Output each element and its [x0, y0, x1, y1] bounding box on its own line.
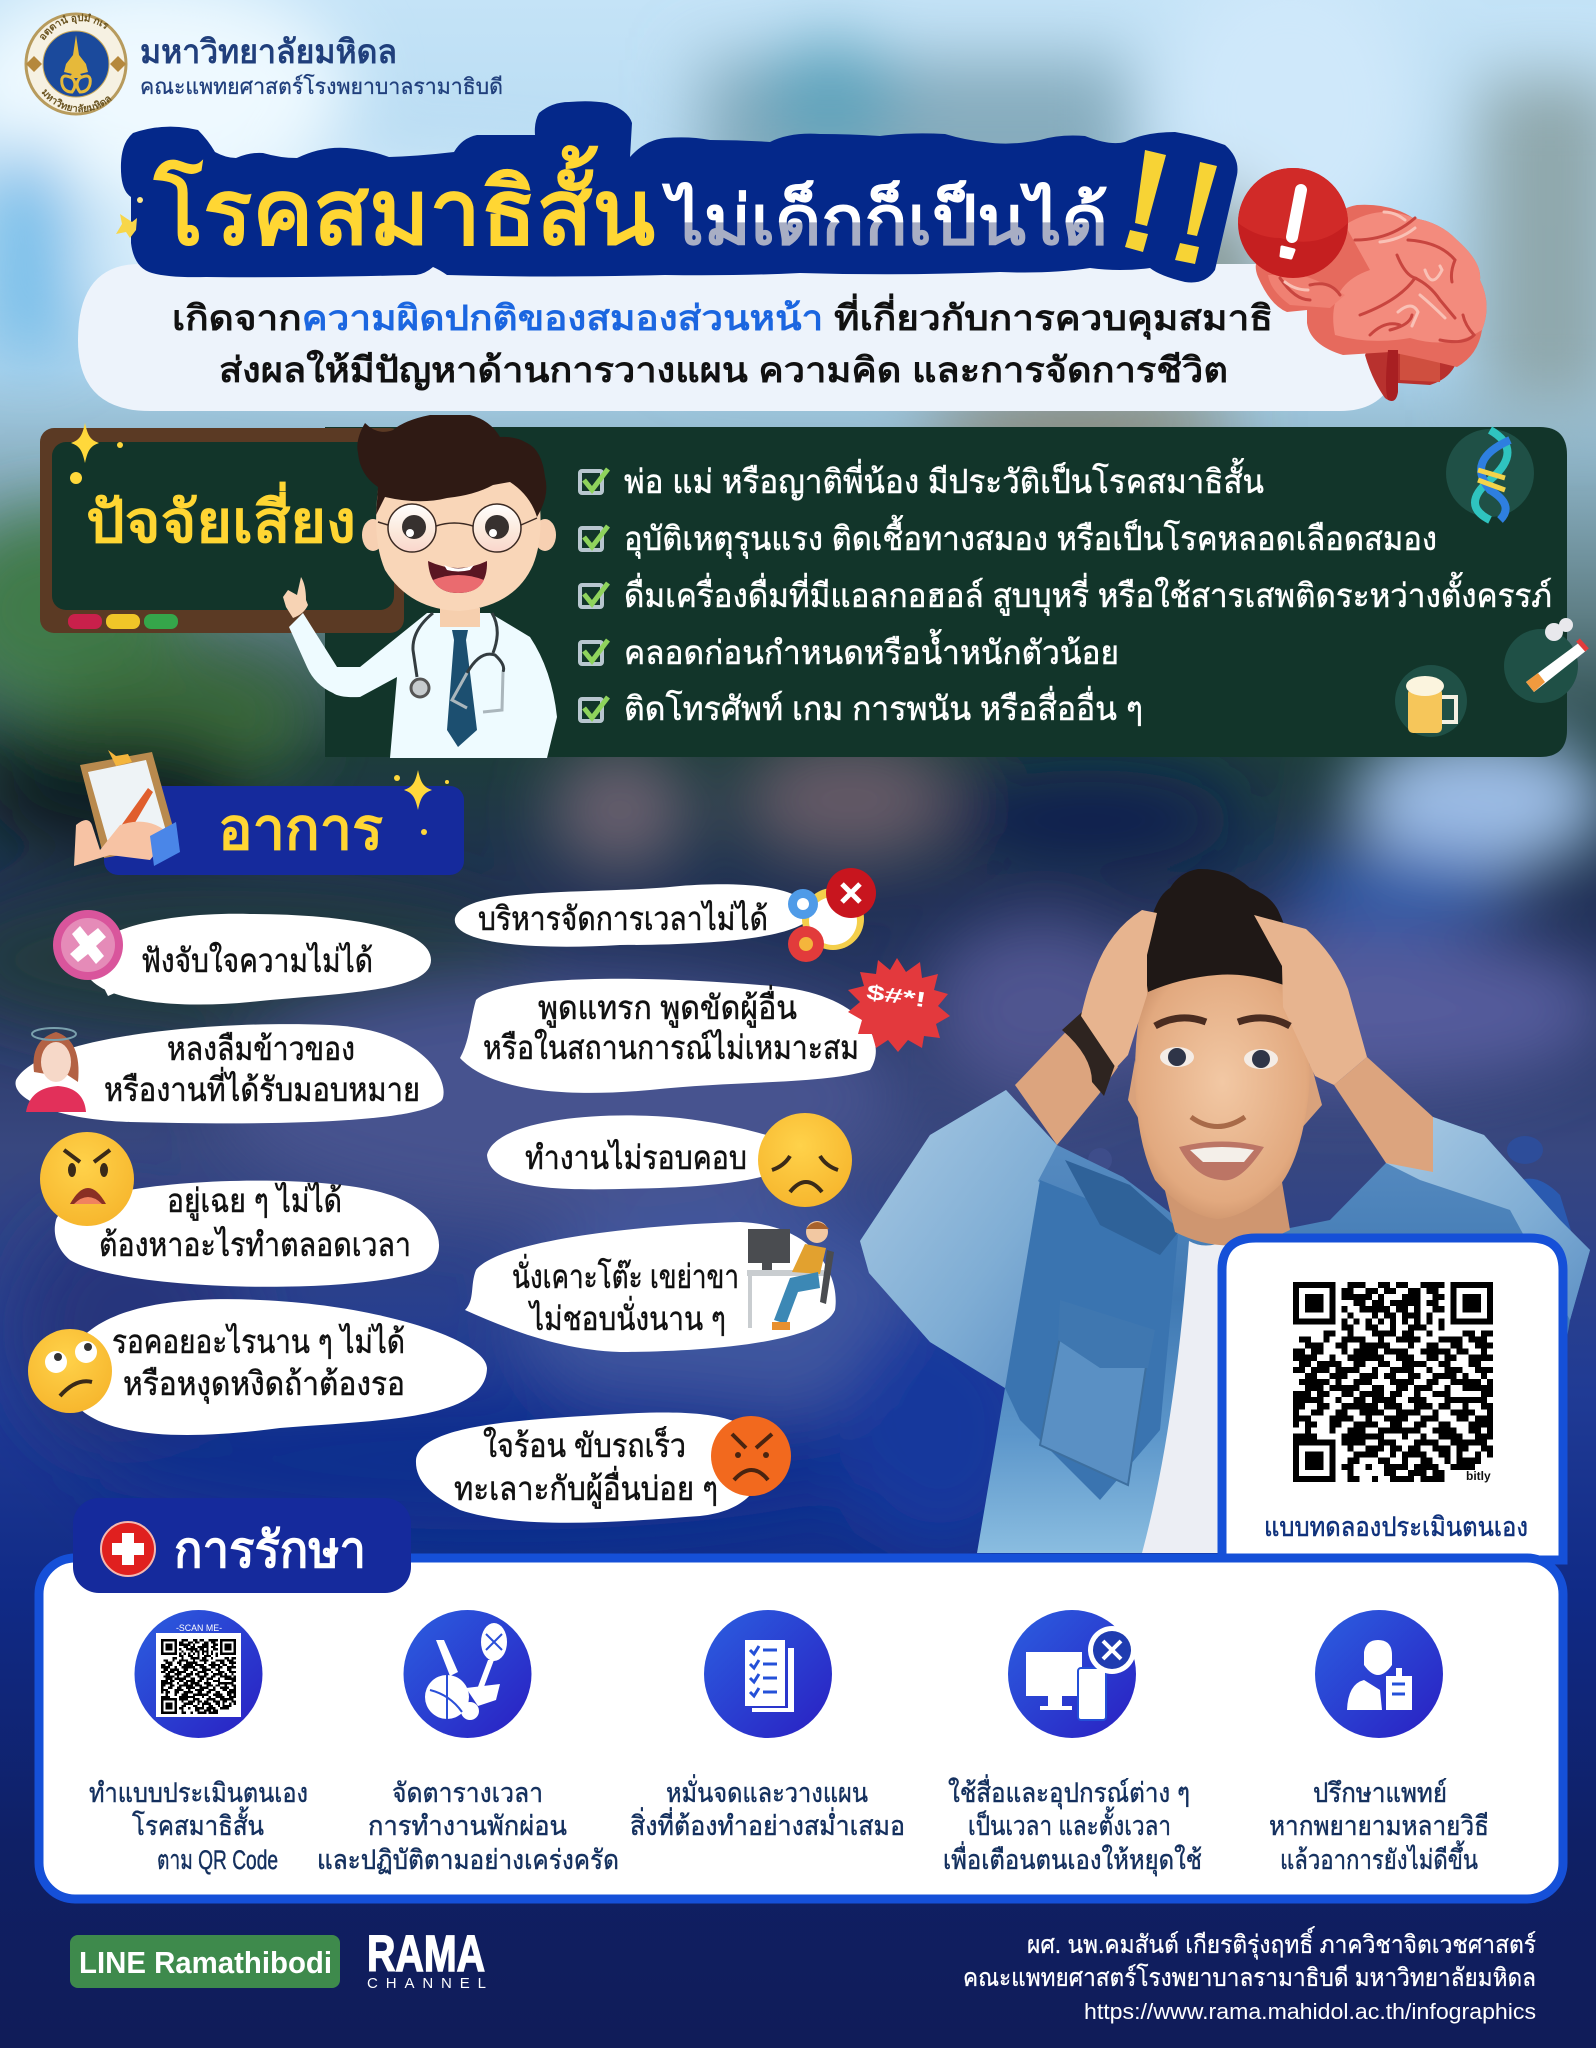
- eyes and brows: [1155, 1018, 1290, 1069]
- panel: QR self-assessment: [1222, 1238, 1563, 1560]
- tie: [447, 630, 477, 747]
- icon: person fidgeting at desk: [747, 1221, 834, 1330]
- icon: rolling eyes emoji: [28, 1329, 112, 1413]
- doctor character: [283, 415, 557, 758]
- panel heading: symptoms: [74, 750, 464, 875]
- mouth: [428, 561, 487, 593]
- symptom bubble 9: ทะเลาะกับผู้อื่นบ่อย ๆ: [454, 1466, 718, 1509]
- glasses and eyes: [378, 504, 537, 552]
- treatment 3: checklist: สิ่งที่ต้องทำอย่างสม่ำเสมอ: [630, 1807, 905, 1841]
- symptom bubble 9: [416, 1413, 791, 1523]
- sparkles: [394, 770, 449, 835]
- risk heading: ปัจจัยเสี่ยง: [86, 481, 356, 555]
- item 4: คลอดก่อนกำหนดหรือน้ำหนักตัวน้อย: [624, 629, 1119, 671]
- hand left: [1081, 910, 1157, 1068]
- symptom bubble 5: [455, 868, 876, 962]
- title: exclamation marks: [1125, 150, 1217, 264]
- icon: shouting emoji: [40, 1132, 134, 1226]
- icon: brain with warning: [1238, 168, 1487, 401]
- footer: LINE pill: LINE Ramathibodi: [79, 1945, 332, 1980]
- item 2: อุบัติเหตุรุนแรง ติดเชื้อทางสมอง หรือเป็นโรคหลอดเลือดสมอง: [624, 515, 1437, 559]
- symptom bubble 4: รอคอยอะไรนาน ๆ ไม่ได้: [112, 1323, 405, 1360]
- treatment 4: limit devices: เป็นเวลา และตั้งเวลา: [968, 1806, 1171, 1841]
- icon: angry emoji: [711, 1416, 791, 1496]
- star: [116, 197, 143, 238]
- checklist: [580, 458, 1552, 727]
- hand right: [1254, 915, 1367, 1085]
- symptom bubble 1: [53, 910, 431, 1005]
- icon: DNA: [1446, 429, 1534, 520]
- item 1: พ่อ แม่ หรือญาติพี่น้อง มีประวัติเป็นโรคสมาธิสั้น: [624, 458, 1264, 500]
- title banner: [116, 101, 1238, 282]
- jacket: [860, 1090, 1590, 1553]
- symptom bubble 3: ต้องหาอะไรทำตลอดเวลา: [99, 1226, 411, 1263]
- icon: swear burst: $#*!: [865, 981, 928, 1012]
- footer: RAMA Channel logo: RAMA: [367, 1925, 485, 1982]
- symptom bubble 8: [465, 1221, 836, 1352]
- logo: Mahidol seal: มหาวิทยาลัยมหิดล: [42, 89, 112, 112]
- nose and mouth: [1179, 1117, 1264, 1180]
- icon: beer: [1395, 665, 1467, 737]
- neck: [440, 608, 480, 627]
- faculty name: คณะแพทยศาสตร์โรงพยาบาลรามาธิบดี: [140, 74, 503, 99]
- treatment 4: limit devices: ใช้สื่อและอุปกรณ์ต่าง ๆ: [948, 1774, 1190, 1810]
- treatment 3: checklist: [630, 1610, 905, 1841]
- treatment 4: limit devices: [943, 1610, 1202, 1877]
- treatment 1: assessment: -SCAN ME-: [176, 1623, 222, 1633]
- treatment 1: assessment: ตาม QR Code: [157, 1845, 278, 1875]
- chest pocket: [1040, 1310, 1150, 1485]
- hand: [283, 577, 308, 618]
- subtitle line 1: เกิดจาก ความผิดปกติของสมองส่วนหน้า ที่เกี่ยวกับการควบคุมสมาธิ: [172, 293, 1273, 340]
- footer: LINE pill: [70, 1935, 340, 1988]
- icon: clipboard and hand: [74, 750, 180, 866]
- heading text: อาการ: [218, 797, 383, 862]
- QR caption: แบบทดลองประเมินตนเอง: [1264, 1512, 1528, 1542]
- symptom bubble 2: [16, 1024, 444, 1123]
- footer: credits: https://www.rama.mahidol.ac.th/infographics: [1084, 1999, 1536, 2024]
- footer: RAMA Channel logo: [367, 1925, 486, 1992]
- face: [1135, 970, 1310, 1219]
- footer: credits: คณะแพทยศาสตร์โรงพยาบาลรามาธิบดี มหาวิทยาลัยมหิดล: [963, 1963, 1536, 1992]
- neck: [1160, 1170, 1290, 1246]
- symptom bubble 3: [40, 1132, 439, 1287]
- item 5: ติดโทรศัพท์ เกม การพนัน หรือสื่ออื่น ๆ: [624, 686, 1143, 727]
- right sleeve: [1386, 1117, 1590, 1320]
- sparkles: [70, 423, 123, 484]
- face: [376, 470, 541, 611]
- stethoscope: [413, 613, 504, 677]
- treatment 1: assessment: โรคสมาธิสั้น: [132, 1806, 264, 1841]
- symptom bubble 7: [487, 1113, 852, 1207]
- icon: sad emoji: [758, 1113, 852, 1207]
- ears: [362, 519, 384, 551]
- icon: dizzy woman: [26, 1028, 86, 1112]
- symptom bubble 5: บริหารจัดการเวลาไม่ได้: [478, 900, 768, 937]
- QR code: [1293, 1285, 1493, 1479]
- treatment 2: schedule and activities: [317, 1610, 619, 1875]
- icon: swear burst: [848, 958, 950, 1052]
- left sleeve: [860, 1090, 1075, 1388]
- treatment 5: consult doctor: [1269, 1610, 1489, 1875]
- icon: magnifier: [53, 910, 123, 996]
- item 3: ดื่มเครื่องดื่มที่มีแอลกอฮอล์ สูบบุหรี่ หรือใช้สารเสพติดระหว่างตั้งครรภ์: [624, 572, 1552, 616]
- treatment 2: schedule and activities: และปฏิบัติตามอย่างเคร่งครัด: [317, 1845, 619, 1875]
- bitly mark: bitly: [1466, 1469, 1491, 1483]
- symptom bubble 6: หรือในสถานการณ์ไม่เหมาะสม: [483, 1029, 859, 1066]
- symptom bubble 7: ทำงานไม่รอบคอบ: [525, 1139, 747, 1176]
- forearm right: [1334, 1057, 1433, 1172]
- background passers-by: [1088, 1136, 1580, 1260]
- treatment 4: limit devices: เพื่อเตือนตนเองให้หยุดใช้: [943, 1841, 1202, 1877]
- symptom bubble 8: ไม่ชอบนั่งนาน ๆ: [527, 1296, 726, 1337]
- symptom bubble 4: หรือหงุดหงิดถ้าต้องรอ: [123, 1365, 405, 1404]
- title: white: ไม่เด็กก็เป็นได้: [662, 180, 1108, 259]
- watch and bracelet: [1062, 1012, 1118, 1096]
- panel: treatment: [39, 1498, 1563, 1899]
- coat and raised arm: [289, 613, 557, 758]
- subtitle line 2: ส่งผลให้มีปัญหาด้านการวางแผน ความคิด และการจัดการชีวิต: [219, 349, 1228, 391]
- treatment 1: assessment: ทำแบบประเมินตนเอง: [89, 1778, 308, 1808]
- treatment 2: schedule and activities: การทำงานพักผ่อน: [368, 1811, 567, 1841]
- treatment 1: assessment: [89, 1610, 308, 1875]
- white shirt: [1142, 1241, 1225, 1553]
- symptom bubble 4: [28, 1299, 487, 1435]
- forearm left: [1015, 1016, 1118, 1145]
- logo: Mahidol seal: อตฺตานํ อุปมํ กเร: [40, 14, 109, 40]
- treatment heading tab: การรักษา: [174, 1522, 366, 1578]
- treatment 3: checklist: หมั่นจดและวางแผน: [666, 1774, 868, 1808]
- icon: clock with gears: [788, 868, 876, 962]
- footer: credits: ผศ. นพ.คมสันต์ เกียรติรุ่งฤทธิ์ ภาควิชาจิตเวชศาสตร์: [1027, 1926, 1536, 1960]
- symptom bubble 2: หรืองานที่ได้รับมอบหมาย: [104, 1067, 420, 1108]
- treatment 2: schedule and activities: จัดตารางเวลา: [392, 1778, 543, 1808]
- treatment 5: consult doctor: หากพยายามหลายวิธี: [1269, 1811, 1489, 1841]
- treatment 5: consult doctor: ปรึกษาแพทย์: [1313, 1777, 1447, 1808]
- symptom bubble 6: พูดแทรก พูดขัดผู้อื่น: [538, 985, 797, 1028]
- footer: credits: [963, 1926, 1536, 2024]
- icon: cigarette: [1504, 618, 1587, 703]
- title: yellow: โรคสมาธิสั้น: [153, 145, 655, 264]
- collar: [1065, 1160, 1180, 1255]
- hair: [357, 415, 546, 517]
- subtitle panel: [78, 264, 1400, 411]
- treatment 5: consult doctor: แล้วอาการยังไม่ดีขึ้น: [1280, 1840, 1478, 1875]
- symptom bubble 9: ใจร้อน ขับรถเร็ว: [483, 1426, 686, 1464]
- photo: worried young man: [860, 869, 1590, 1553]
- hair: [1145, 869, 1292, 992]
- university name: มหาวิทยาลัยมหิดล: [140, 33, 397, 70]
- symptom bubble 3: อยู่เฉย ๆ ไม่ได้: [167, 1182, 342, 1221]
- logo: Mahidol seal: [24, 12, 128, 116]
- symptom bubble 8: นั่งเคาะโต๊ะ เขย่าขา: [512, 1254, 739, 1295]
- symptom bubble 6: [460, 958, 950, 1093]
- symptom bubble 2: หลงลืมข้าวของ: [167, 1030, 355, 1067]
- chalkboard: [40, 428, 404, 633]
- footer: RAMA Channel logo: CHANNEL: [367, 1975, 486, 1992]
- panel: risk factors: [40, 415, 1587, 758]
- green panel: [325, 427, 1567, 757]
- front dark panel: [1005, 1180, 1178, 1500]
- symptom bubble 1: ฟังจับใจความไม่ได้: [141, 942, 373, 979]
- ears: [1128, 1060, 1322, 1130]
- treatment heading tab: [73, 1498, 411, 1593]
